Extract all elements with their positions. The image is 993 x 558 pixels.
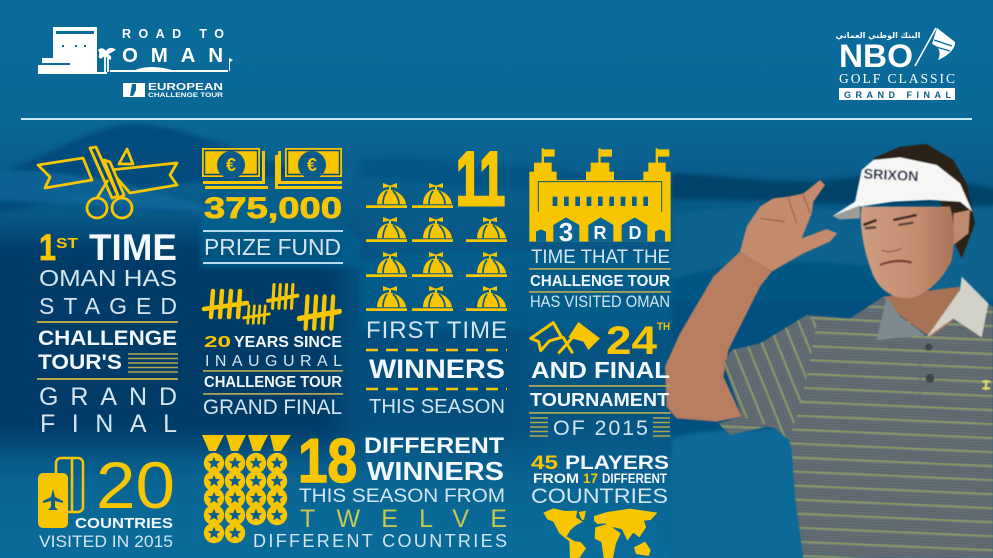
logo: Road to Oman: [38, 27, 233, 99]
panel: 18 different winners: WINNERS: [367, 456, 504, 486]
icon: euro banknotes: [202, 148, 342, 189]
icon: scissors cutting ribbon: [38, 147, 177, 218]
collar: [877, 277, 988, 340]
icon: flags row: [202, 435, 291, 451]
panel: third visit to Oman: CHALLENGE TOUR: [530, 273, 670, 290]
visor: [833, 157, 972, 219]
panel: 20 years since inaugural: YEARS SINCE: [234, 334, 342, 351]
sleeve: [723, 315, 817, 440]
header divider: [21, 118, 972, 120]
panel: third visit to Oman: R: [594, 223, 606, 243]
panel: third visit to Oman: TIME THAT THE: [531, 247, 670, 268]
panel: 24th and final tournament: [529, 319, 671, 440]
icon: fort: [529, 148, 671, 242]
panel: 45 players from 17 countries: PLAYERS: [565, 453, 669, 474]
icon: tally marks: [204, 285, 340, 328]
panel: 45 players from 17 countries: DIFFERENT: [602, 471, 668, 486]
panel: 20 countries visited: COUNTRIES: [75, 515, 173, 532]
panel: first time Oman staged grand final: CHALLENGE: [38, 327, 177, 350]
panel: first time Oman staged grand final: OMAN HAS: [39, 265, 177, 291]
panel: prize fund: PRIZE FUND: [204, 234, 341, 260]
photo: golfer: [665, 144, 993, 558]
visor: SRIXON: [863, 165, 919, 184]
panel: 45 players from 17 countries: 45: [531, 453, 559, 474]
logo: Road to Oman: EUROPEAN: [148, 81, 223, 93]
icon: world map: [543, 508, 657, 558]
panel: 24th and final tournament: TOURNAMENT: [530, 390, 669, 410]
icon: crossed flags: [531, 322, 600, 353]
panel: 18 different winners: TWELVE: [300, 505, 507, 533]
panel: 45 players from 17 countries: COUNTRIES: [531, 485, 668, 508]
face: [861, 207, 954, 298]
panel: 20 years since inaugural: 20: [204, 334, 231, 351]
logo: NBO Golf Classic: GOLF CLASSIC: [839, 71, 955, 86]
panel: first time winners: THIS SEASON: [369, 396, 505, 418]
arm: [665, 252, 772, 422]
panel: first time Oman staged grand final: GRAND: [39, 383, 177, 411]
logo: NBO Golf Classic: البنك الوطني العماني: [836, 31, 921, 40]
icon: star medals: [204, 453, 287, 543]
logo: NBO Golf Classic: [836, 28, 955, 100]
logo: NBO Golf Classic: GRAND FINAL: [844, 90, 952, 100]
hair: [873, 144, 975, 258]
panel: 20 countries visited: VISITED IN 2015: [39, 532, 173, 551]
logo: Road to Oman: OMAN: [122, 44, 223, 67]
panel: 24th and final tournament: TH: [657, 321, 670, 333]
panel: 18 different winners: [202, 427, 507, 551]
panel: 18 different winners: DIFFERENT: [364, 433, 505, 458]
panel: third visit to Oman: D: [628, 223, 642, 243]
panel: 24th and final tournament: OF 2015: [553, 416, 648, 440]
panel: first time Oman staged grand final: FINAL: [40, 410, 177, 438]
panel: 20 years since inaugural: [203, 285, 343, 419]
placket and buttons: [920, 344, 990, 403]
logo: Road to Oman: ROAD TO: [122, 27, 224, 41]
panel: prize fund: [202, 148, 343, 264]
panel: first time winners: [366, 137, 507, 418]
panel: first time winners: 11: [456, 137, 505, 222]
panel: 24th and final tournament: AND FINAL: [531, 357, 670, 383]
logo: Road to Oman: CHALLENGE TOUR: [148, 92, 223, 99]
panel: 18 different winners: DIFFERENT COUNTRIES: [253, 531, 507, 551]
panel: first time Oman staged grand final: TIME: [89, 227, 177, 268]
panel: 18 different winners: THIS SEASON FROM: [299, 486, 505, 507]
panel: 45 players from 17 countries: 17: [583, 471, 598, 486]
panel: third visit to Oman: HAS VISITED OMAN: [530, 293, 670, 311]
shirt body: [718, 290, 993, 558]
icon: euro banknotes: €: [307, 155, 317, 175]
panel: 18 different winners: 18: [298, 427, 357, 496]
hand: [740, 180, 837, 272]
panel: 45 players from 17 countries: FROM: [533, 471, 579, 486]
panel: first time Oman staged grand final: TOUR'S: [38, 351, 122, 374]
panel: first time Oman staged grand final: [37, 147, 178, 438]
panel: 20 years since inaugural: GRAND FINAL: [203, 396, 342, 419]
panel: first time Oman staged grand final: 1: [39, 227, 56, 268]
panel: 45 players from 17 countries: [531, 453, 669, 558]
panel: 20 years since inaugural: INAUGURAL: [205, 353, 342, 370]
panel: prize fund: 375,000: [204, 192, 342, 225]
panel: first time winners: FIRST TIME: [366, 317, 507, 344]
icon: luggage with plane: [38, 458, 83, 528]
panel: first time Oman staged grand final: ST: [56, 235, 78, 252]
panel: 20 countries visited: 20: [96, 448, 175, 522]
panel: third visit to Oman: [529, 148, 671, 311]
panel: 24th and final tournament: 24: [606, 319, 658, 363]
panel: third visit to Oman: 3: [559, 217, 573, 247]
icon: propeller hats: [366, 183, 507, 311]
panel: 20 years since inaugural: CHALLENGE TOUR: [204, 374, 342, 391]
neck: [883, 287, 960, 337]
panel: 20 countries visited: [38, 448, 175, 551]
logo: NBO Golf Classic: NBO: [839, 38, 913, 74]
icon: euro banknotes: €: [226, 155, 236, 175]
panel: first time winners: WINNERS: [369, 354, 505, 384]
ear: [953, 210, 970, 245]
panel: first time Oman staged grand final: STAGED: [39, 293, 177, 319]
